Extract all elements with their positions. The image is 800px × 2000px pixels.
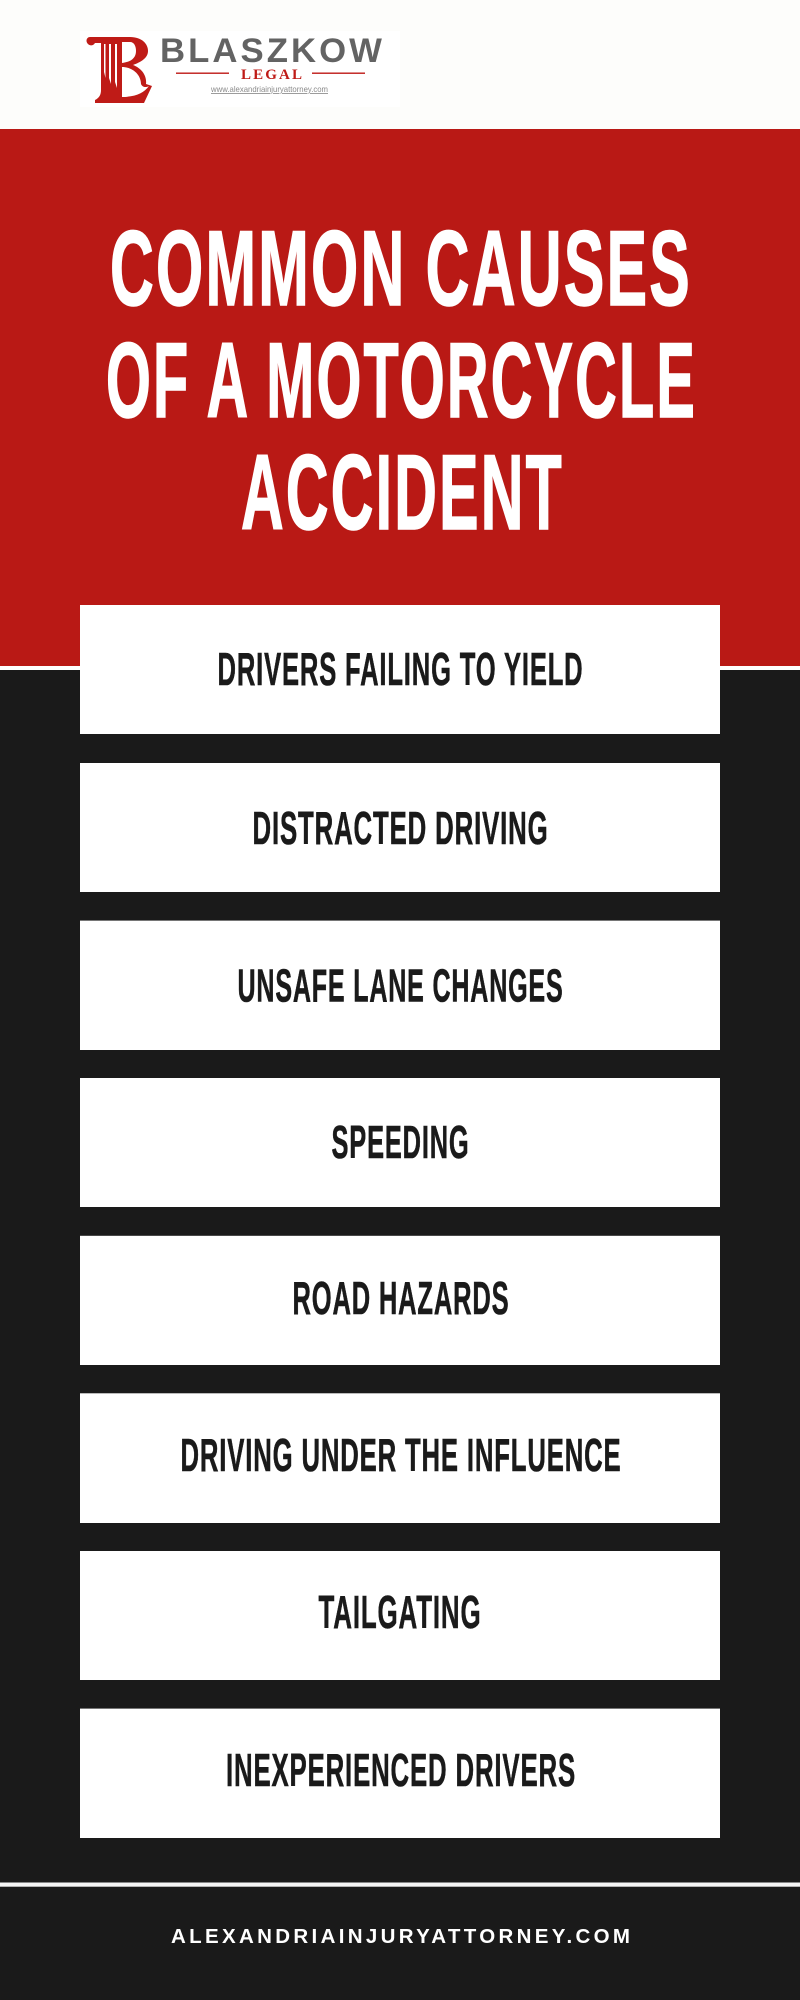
subtitle: legal: LEGAL: [241, 67, 302, 83]
footer website: ALEXANDRIAINJURYATTORNEY.COM: [171, 1925, 630, 1948]
panel: unsafe lane changes: [80, 921, 720, 1050]
panel: tailgating: [80, 1551, 720, 1680]
panel: inexperienced drivers: [80, 1709, 720, 1838]
panel: drivers failing to yield: [80, 605, 720, 734]
panel: driving under the influence: [80, 1393, 720, 1523]
brand name: BLASZKOW: [160, 32, 385, 70]
panel: speeding: [80, 1078, 720, 1207]
panel: road hazards: [80, 1236, 720, 1365]
title: [106, 208, 697, 552]
panel: distracted driving: [80, 763, 720, 892]
website url: www.alexandriainjuryattorney.com: [210, 84, 328, 94]
panel: distracted driving: DISTRACTED DRIVING: [252, 802, 548, 854]
panel: speeding: SPEEDING: [332, 1116, 470, 1168]
logo: Blaszkow Legal: [80, 31, 400, 107]
icon: column letter B L monogram: [87, 37, 152, 103]
panel: road hazards: ROAD HAZARDS: [292, 1272, 510, 1324]
panel: tailgating: TAILGATING: [318, 1586, 482, 1638]
